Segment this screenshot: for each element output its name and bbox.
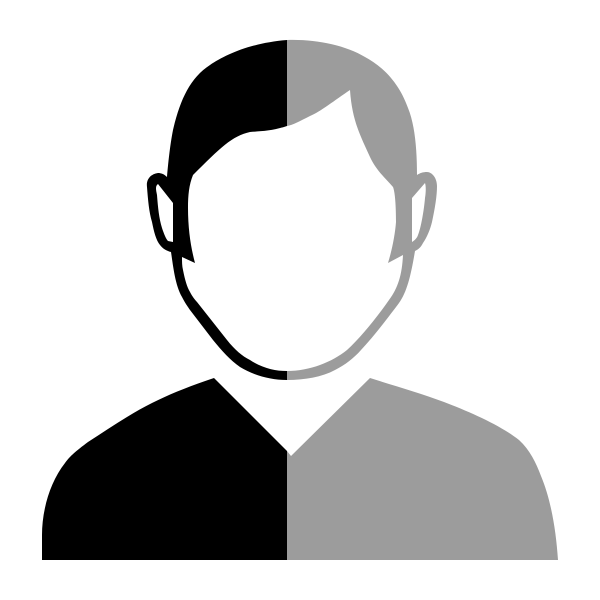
body: gray right half of shirt xyxy=(287,378,558,560)
head: black left half with hair, ear and jaw xyxy=(147,40,287,380)
body: black left half of shirt xyxy=(42,378,287,560)
head: gray right half with hair, ear and jaw xyxy=(287,40,437,380)
avatar icon: half black, half gray man xyxy=(42,40,558,560)
